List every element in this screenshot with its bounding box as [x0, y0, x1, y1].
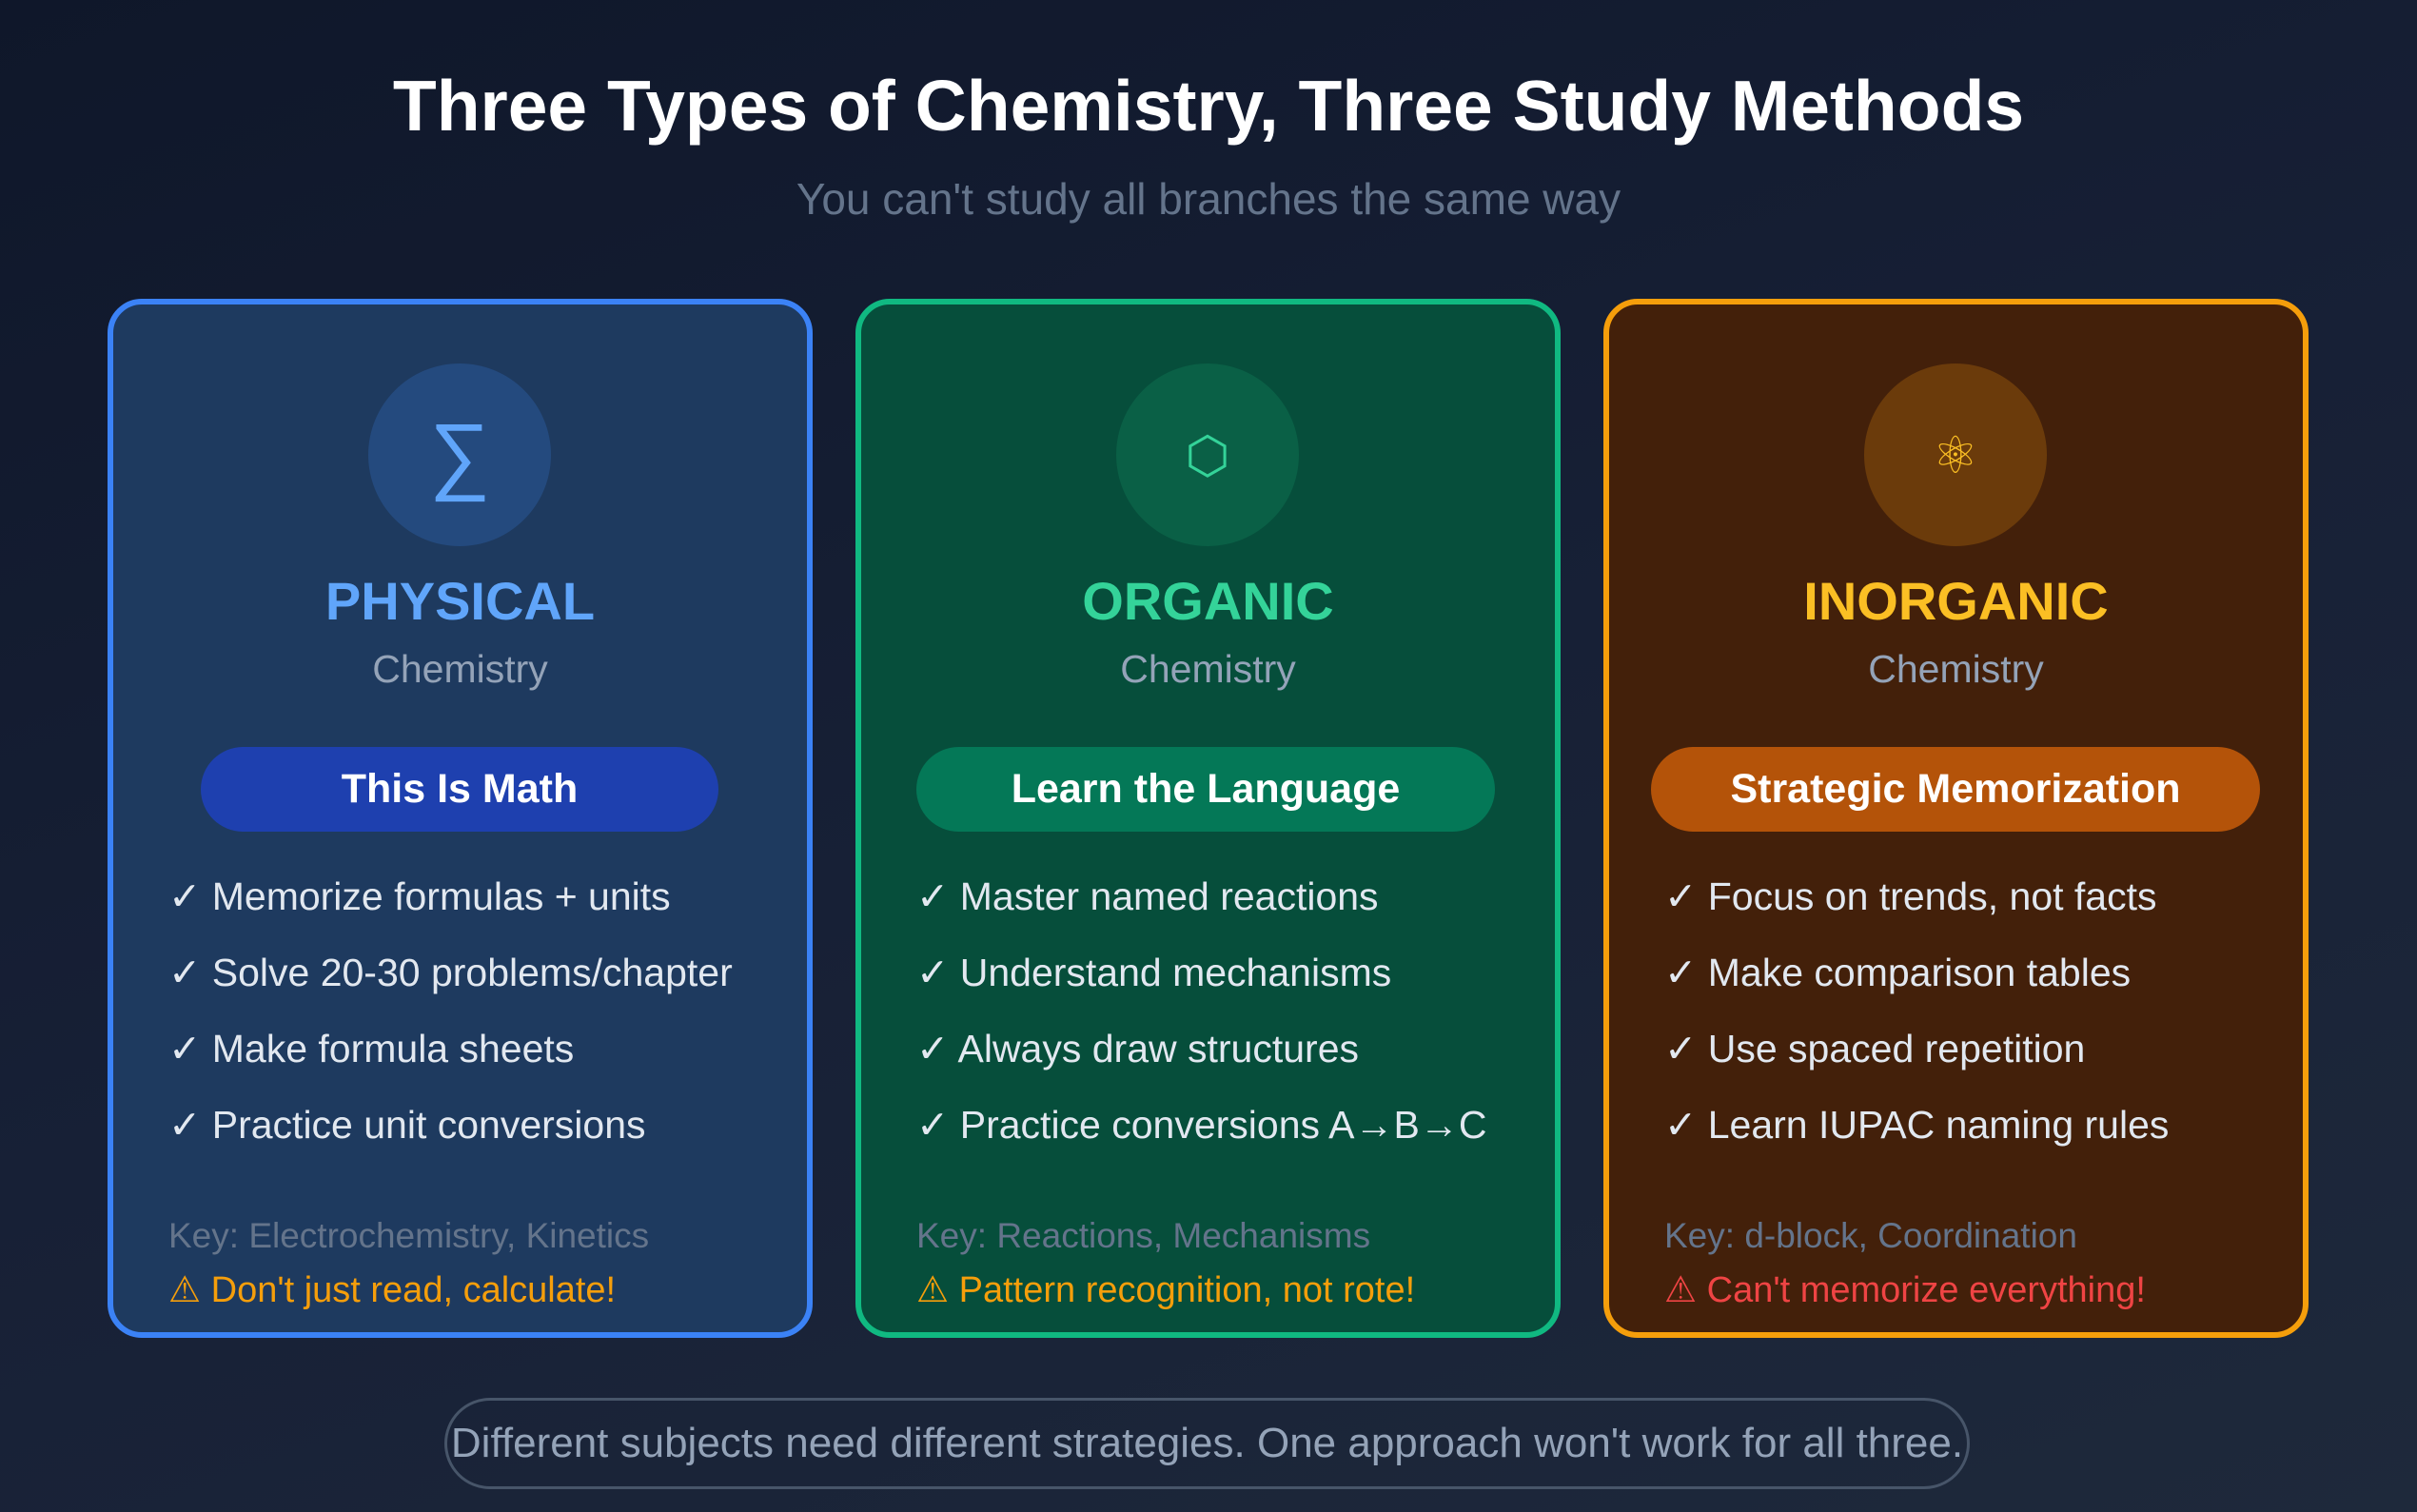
subheading: Chemistry [1868, 647, 2044, 691]
pill: learn the language: Learn the Language [1012, 766, 1400, 812]
heading: organic: ORGANIC [1082, 571, 1334, 631]
subtitle: You can't study all branches the same way [796, 174, 1621, 224]
pill: strategic memorization: Strategic Memorization [1730, 766, 2181, 812]
icon: hexagon: ⬡ [1185, 426, 1230, 483]
pill: learn the language [916, 747, 1495, 832]
key topics: Key: Electrochemistry, Kinetics [168, 1216, 649, 1255]
checklist: ✓ Master named reactions [916, 874, 1379, 918]
heading: inorganic: INORGANIC [1803, 571, 2109, 631]
key topics: Key: Reactions, Mechanisms [916, 1216, 1370, 1255]
checklist: ✓ Understand mechanisms [916, 951, 1391, 994]
panel: physical [108, 299, 813, 1338]
icon: sigma [368, 363, 551, 546]
checklist: ✓ Make formula sheets [168, 1027, 574, 1070]
bottom callout: Different subjects need different strategies. One approach won't work for all three. [451, 1420, 1963, 1466]
checklist: ✓ Always draw structures [916, 1027, 1359, 1070]
warning: ⚠ Don't just read, calculate! [168, 1270, 616, 1310]
checklist [168, 874, 733, 1147]
subheading: Chemistry [1120, 647, 1296, 691]
checklist: ✓ Practice conversions A→B→C [916, 1103, 1486, 1147]
title: Three Types of Chemistry, Three Study Methods [393, 66, 2024, 146]
panel: inorganic [1603, 299, 2309, 1338]
pill: strategic memorization [1651, 747, 2260, 832]
checklist: ✓ Learn IUPAC naming rules [1664, 1103, 2169, 1147]
warning: ⚠ Can't memorize everything! [1664, 1270, 2146, 1310]
checklist: ✓ Focus on trends, not facts [1664, 874, 2156, 918]
checklist [1664, 874, 2169, 1147]
panel: organic [855, 299, 1561, 1338]
warning: ⚠ Pattern recognition, not rote! [916, 1270, 1415, 1310]
checklist: ✓ Memorize formulas + units [168, 874, 671, 918]
checklist: ✓ Practice unit conversions [168, 1103, 646, 1147]
checklist: ✓ Solve 20-30 problems/chapter [168, 951, 733, 994]
subheading: Chemistry [372, 647, 548, 691]
key topics: Key: d-block, Coordination [1664, 1216, 2077, 1255]
icon: atom [1864, 363, 2047, 546]
checklist: ✓ Use spaced repetition [1664, 1027, 2085, 1070]
heading: physical: PHYSICAL [325, 571, 595, 631]
checklist [916, 874, 1486, 1147]
icon: hexagon [1116, 363, 1299, 546]
icon: sigma: ∑ [429, 407, 490, 502]
icon: atom: ⚛ [1933, 426, 1978, 483]
pill: this is math [201, 747, 718, 832]
checklist: ✓ Make comparison tables [1664, 951, 2131, 994]
bottom callout [444, 1398, 1970, 1489]
pill: this is math: This Is Math [342, 766, 578, 812]
